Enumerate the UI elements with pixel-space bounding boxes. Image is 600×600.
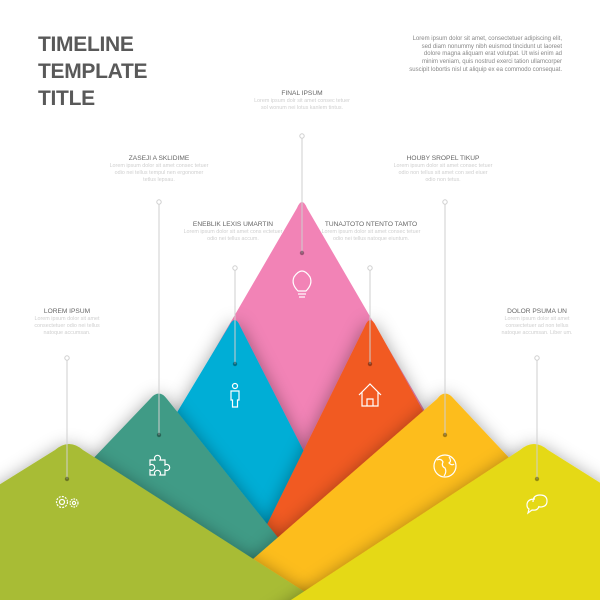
label: tunajtoto: Lorem ipsum dolor sit amet consec tetuer odio nei tellus natoque eiuntum. bbox=[322, 229, 420, 242]
mountain: pink bbox=[46, 202, 558, 600]
label: houby: HOUBY SROPEL TIKUP bbox=[407, 155, 479, 162]
icon: house bbox=[359, 384, 381, 406]
label: zaseji: Lorem ipsum dolor sit amet consec tetuer odio nei tellus tempul nen ergonomer tetlus lepsau. bbox=[110, 163, 208, 183]
label: final ipsum: FINAL IPSUM bbox=[281, 90, 323, 97]
mountain: blue bbox=[40, 320, 400, 600]
label: dolor psuma: Lorem ipsum dolor sit amet consectetuer ad non tellus natoque accumsan. Liber um. bbox=[501, 316, 573, 336]
mountain: teal bbox=[0, 394, 360, 600]
title: TEMPLATE bbox=[38, 60, 147, 83]
icon: puzzle bbox=[150, 455, 170, 475]
mountain: yellow bbox=[160, 394, 600, 600]
mountain: orange bbox=[210, 320, 550, 600]
icon: globe bbox=[434, 455, 456, 477]
label: zaseji: ZASEJI A SKLIDIME bbox=[129, 155, 189, 162]
title: TITLE bbox=[38, 87, 95, 110]
label: lorem ipsum: LOREM IPSUM bbox=[44, 308, 90, 315]
label: final ipsum bbox=[254, 90, 350, 111]
icon: bulb bbox=[293, 271, 311, 297]
mountain: lime bbox=[230, 444, 600, 600]
label: eneblik: Lorem ipsum dolor sit amet cons ectetuer odio nei tellus accum. bbox=[184, 229, 282, 242]
connector lines bbox=[65, 134, 539, 479]
label: dolor psuma: DOLOR PSUMA UN bbox=[507, 308, 567, 315]
label: final ipsum: Lorem ipsum dolr sit amet consec tetuer sol wonum nei lotus kanlem tintus. bbox=[254, 98, 350, 111]
label: tunajtoto bbox=[322, 221, 420, 242]
intro paragraph: Lorem ipsum dolor sit amet, consectetuer adipiscing elit, sed diam nonummy nibh euismod tincidunt ut laoreet dolore magna aliquam erat volutpat. Ut wisi enim ad minim veniam, quis nostrud exerci tation ullamcorper suscipit lobortis nisl ut aliquip ex ea commodo consequat. bbox=[409, 36, 562, 73]
label: lorem ipsum: Lorem ipsum dolor sit amet consectetuer odio nei tellus natoque accumsan. bbox=[34, 316, 100, 336]
icon: gears bbox=[56, 496, 78, 508]
label: eneblik bbox=[184, 221, 282, 242]
label: houby: Lorem ipsum dolor sit amet consec tetuer odio non tellus sit amet con sed eiuer odio non tetus. bbox=[394, 163, 492, 183]
title: TIMELINE bbox=[38, 33, 134, 56]
label: tunajtoto: TUNAJTOTO NTENTO TAMTO bbox=[325, 221, 417, 228]
mountain: green bbox=[0, 444, 380, 600]
title bbox=[38, 33, 147, 110]
icon: chat bbox=[527, 495, 547, 513]
label: eneblik: ENEBLIK LEXIS UMARTIN bbox=[193, 221, 273, 228]
icon: person bbox=[231, 384, 239, 407]
